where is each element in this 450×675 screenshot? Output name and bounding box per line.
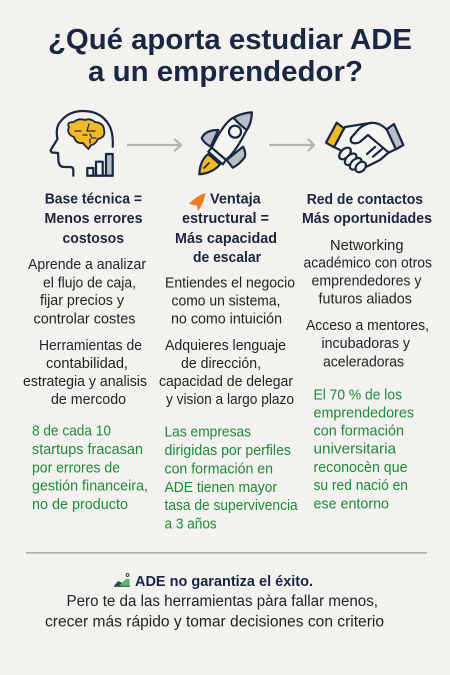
heading: base técnica: costosos	[62, 231, 124, 247]
heading: ventaja estructural: Ventaja	[210, 191, 262, 207]
text: green statistic supervivencia	[164, 424, 298, 532]
text: green statistic supervivencia: dirigidas por perfiles	[164, 443, 291, 459]
icon: small chart with figure	[114, 574, 130, 586]
text: mentores: Acceso a mentores,	[306, 318, 429, 334]
text: conclusion body: crecer más rápido y tomar decisiones con criterio	[45, 614, 384, 631]
panel: red de contactos	[302, 192, 432, 512]
text: lenguaje de dirección: de dirección,	[181, 356, 261, 372]
text: green statistic supervivencia: ADE tienen mayor	[164, 480, 277, 496]
text: networking: futuros aliados	[318, 292, 412, 308]
arrow: rocket to handshake	[270, 140, 314, 150]
text: flujo de caja: fijar precios y	[40, 293, 125, 309]
heading: base técnica	[44, 191, 142, 247]
text: green statistic 70 %: emprendedores	[314, 405, 414, 421]
heading: ventaja estructural	[175, 191, 277, 266]
icon: handshake	[326, 123, 403, 174]
text: negocio como sistema	[165, 276, 295, 328]
heading: red de contactos: Red de contactos	[307, 192, 423, 208]
text: conclusion body	[45, 593, 384, 631]
text: flujo de caja: el flujo de caja,	[43, 276, 136, 292]
text: networking: emprendedores y	[312, 274, 422, 290]
icon: head with brain and bar chart	[51, 111, 113, 176]
heading: base técnica: Base técnica =	[45, 191, 142, 207]
text: green statistic 70 %: reconocèn que	[314, 460, 408, 476]
title: a un emprendedor?	[88, 56, 363, 88]
title: ¿Qué aporta estudiar ADE	[48, 24, 412, 56]
text: networking: Networking	[330, 238, 404, 254]
heading: ventaja estructural: estructural =	[182, 211, 269, 227]
text: lenguaje de dirección	[159, 338, 294, 408]
text: green statistic startups: gestión financeira,	[32, 478, 148, 494]
heading: ventaja estructural: de escalar	[193, 250, 261, 266]
text: herramientas: de mercodo	[51, 392, 126, 408]
heading: red de contactos: Más oportunidades	[302, 211, 432, 227]
text: green statistic 70 %: El 70 % de los	[314, 387, 402, 403]
icon: rocket	[199, 112, 252, 174]
text: green statistic supervivencia: con formación en	[164, 462, 273, 478]
text: green statistic supervivencia: Las empresas	[164, 424, 251, 440]
text: green statistic startups: startups fracasan	[32, 442, 143, 458]
text: ADE no garantiza: ADE no garantiza el éxito.	[135, 573, 313, 590]
conclusion	[45, 573, 384, 631]
text: networking	[304, 238, 432, 308]
text: green statistic supervivencia: tasa de supervivencia	[164, 498, 298, 514]
text: green statistic 70 %: con formación	[314, 424, 404, 440]
text: herramientas: Herramientas de	[39, 338, 142, 354]
text: mentores: aceleradoras	[323, 355, 404, 371]
heading: ventaja estructural: Más capacidad	[175, 231, 277, 247]
text: flujo de caja: controlar costes	[34, 312, 136, 328]
text: herramientas: estrategia y analisis	[23, 374, 147, 390]
text: lenguaje de dirección: Adquieres lenguaje	[165, 338, 286, 354]
text: negocio como sistema: como un sistema,	[172, 294, 280, 310]
text: green statistic 70 %: universitaria	[314, 442, 397, 458]
text: mentores	[306, 318, 429, 371]
text: mentores: incubadoras y	[322, 336, 411, 352]
text: green statistic startups	[32, 424, 148, 513]
panel: ventaja estructural	[159, 191, 298, 532]
arrow: head to rocket	[128, 140, 181, 150]
text: green statistic 70 %: su red nació en	[314, 478, 408, 494]
panel: base técnica	[23, 191, 148, 513]
text: herramientas: contabilidad,	[46, 356, 128, 372]
heading: base técnica: Menos errores	[44, 211, 142, 227]
text: green statistic startups: 8 de cada 10	[32, 424, 111, 440]
heading: red de contactos	[302, 192, 432, 227]
text: negocio como sistema: no como intuición	[171, 312, 282, 328]
text: green statistic 70 %: ese entorno	[314, 496, 389, 512]
text: green statistic startups: no de producto	[32, 497, 128, 513]
text: lenguaje de dirección: capacidad de delegar	[159, 374, 293, 390]
text: negocio como sistema: Entiendes el negocio	[165, 276, 295, 292]
text: green statistic startups: por errores de	[32, 460, 120, 476]
title	[48, 24, 412, 88]
text: flujo de caja	[28, 257, 146, 328]
text: herramientas	[23, 338, 147, 408]
text: green statistic 70 %	[314, 387, 414, 512]
text: flujo de caja: Aprende a analizar	[28, 257, 146, 273]
text: networking: académico con otros	[304, 256, 432, 272]
text: green statistic supervivencia: a 3 años	[164, 516, 217, 532]
text: lenguaje de dirección: y vision a largo plazo	[166, 392, 294, 408]
text: conclusion body: Pero te da las herramientas pàra fallar menos,	[66, 593, 378, 610]
